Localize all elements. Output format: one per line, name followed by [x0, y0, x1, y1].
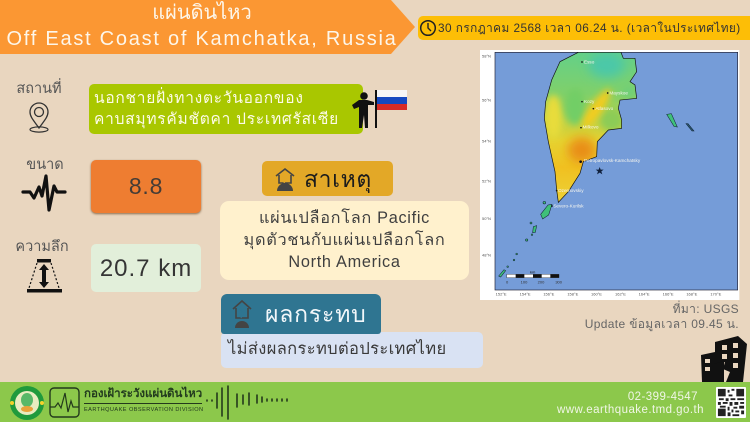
place labels: Ozernovskiy [558, 188, 584, 193]
QR code [716, 387, 746, 418]
icon: cracked house [276, 168, 294, 191]
depth value box [91, 244, 201, 292]
location text box: คาบสมุทรคัมชัตคา ประเทศรัสเซีย [94, 110, 339, 128]
magnitude label: ขนาด [26, 157, 64, 173]
cause text box [220, 201, 469, 280]
place labels: Esso [584, 59, 595, 64]
date text: 30 กรกฎาคม 2568 เวลา 06.24 น. (เวลาในประเทศไทย) [438, 21, 741, 35]
impact heading text: ผลกระทบ [265, 301, 367, 327]
map axis labels: 48°N [482, 252, 491, 257]
map of Kamchatka [480, 50, 740, 300]
icon: collapsed buildings [701, 336, 747, 382]
magnitude value box [91, 160, 201, 213]
magnitude value box: 8.8 [129, 173, 163, 199]
date and time bar [418, 16, 750, 40]
division name: กองเฝ้าระวังแผ่นดินไหว [84, 388, 202, 400]
map axis labels: 166°E [663, 292, 674, 297]
map axis labels: 50°N [482, 216, 491, 221]
location text box [89, 84, 363, 134]
map axis labels: 162°E [615, 292, 626, 297]
source and update note [585, 300, 739, 332]
icon: clock [420, 20, 436, 36]
islands [499, 114, 694, 277]
map axis labels: 56°N [482, 98, 491, 103]
place labels: Atlasovo [595, 106, 614, 111]
icon: depth arrow [27, 259, 62, 292]
panel: location [16, 78, 407, 134]
icon: person with Russian flag [352, 90, 407, 128]
contact details: www.earthquake.tmd.go.th [557, 404, 704, 416]
division name [84, 386, 202, 404]
map axis labels: 156°E [543, 292, 555, 297]
division name in English: EARTHQUAKE OBSERVATION DIVISION [84, 407, 204, 413]
icon: seismic wave [21, 174, 67, 212]
title text: Off East Coast of Kamchatka, Russia [6, 28, 398, 50]
impact text box [221, 332, 483, 368]
place labels [551, 59, 641, 208]
sound wave decoration [206, 385, 288, 420]
map axis labels: 160°E [591, 292, 602, 297]
location label: สถานที่ [16, 81, 62, 97]
Kamchatka landmass [544, 52, 637, 203]
map axis labels: 164°E [639, 292, 650, 297]
icon: cracked house [232, 300, 252, 328]
impact text box: ไม่ส่งผลกระทบต่อประเทศไทย [228, 340, 447, 358]
impact heading [221, 294, 381, 334]
map scale bar: km [530, 269, 536, 274]
icon: map pin [29, 102, 49, 133]
title banner [0, 0, 415, 54]
place labels: Kozy [584, 99, 595, 104]
map axis labels: 58°N [482, 53, 491, 58]
source and update note: ที่มา: USGS [673, 302, 739, 316]
cause text box: North America [288, 253, 401, 271]
title text [6, 1, 398, 50]
logo: seismograph [49, 387, 80, 418]
map axis labels: 154°E [520, 292, 531, 297]
depth label: ความลึก [15, 239, 69, 255]
cause heading [262, 161, 393, 196]
cause text box: แผ่นเปลือกโลก Pacific [259, 209, 430, 227]
place labels: Milkovo [583, 124, 599, 129]
map axis labels: 170°E [710, 292, 722, 297]
title text: แผ่นดินไหว [152, 2, 252, 24]
place labels: Petropavlovsk-Kamchatsky [584, 158, 641, 163]
map axis labels: 52°N [482, 178, 491, 183]
map axis labels: 54°N [482, 139, 491, 144]
panel: magnitude [21, 157, 202, 216]
logo: TMD seal [10, 386, 44, 420]
depth value box: 20.7 km [100, 255, 192, 282]
map scale bar: 0 [506, 280, 509, 285]
contact details [557, 391, 704, 416]
map axis labels: 152°E [496, 292, 507, 297]
map scale bar [506, 269, 563, 285]
map axis labels: 158°E [567, 292, 579, 297]
place labels: Mayskoe [609, 91, 628, 96]
map scale bar: 200 [538, 280, 545, 285]
map scale bar: 300 [555, 280, 563, 285]
map axis labels: 168°E [686, 292, 698, 297]
contact details: 02-399-4547 [628, 391, 698, 403]
source and update note: Update ข้อมูลเวลา 09.45 น. [585, 317, 739, 331]
location text box: นอกชายฝั่งทางตะวันออกของ [94, 90, 304, 107]
map scale bar: 100 [521, 280, 528, 285]
panel: depth [15, 239, 201, 292]
map axis labels [482, 53, 722, 297]
footer band [0, 382, 750, 422]
cause text box: มุดตัวชนกับแผ่นเปลือกโลก [244, 231, 445, 249]
epicenter star [596, 167, 604, 174]
place labels: Severo-Kurilsk [553, 203, 584, 208]
cause heading text: สาเหตุ [304, 166, 372, 192]
